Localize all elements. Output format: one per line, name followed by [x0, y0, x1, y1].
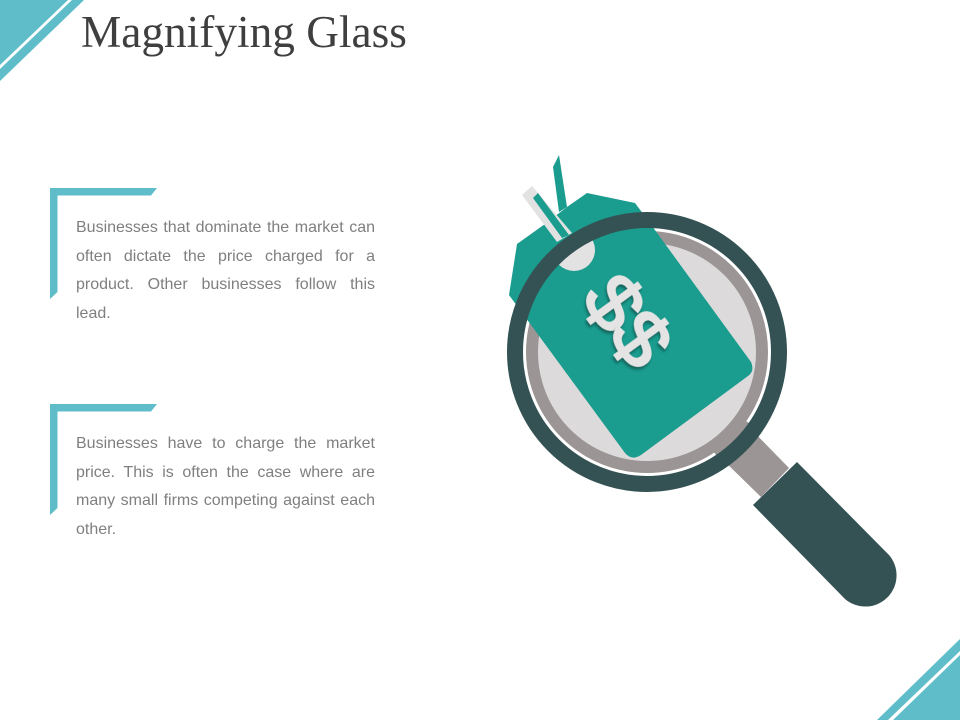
- magnifier dark ring: [515, 220, 779, 484]
- tag string: teal strip upper: [553, 155, 567, 212]
- text block: market price: Businesses have to charge the market price. This is often the case where are many small firms competing against each other.: [76, 435, 375, 538]
- icon: magnifying glass over price tag: [507, 155, 897, 606]
- dollar sign two: $: [593, 295, 689, 383]
- decorative corner: top left: [0, 0, 84, 81]
- text block: dominant businesses: Businesses that dominate the market can often dictate the price charged for a product. Other businesses follow this lead.: [76, 219, 375, 322]
- tag string: teal strip inner: [533, 193, 569, 238]
- bracket accent: first text block: [50, 188, 157, 299]
- lens glass: [537, 242, 757, 462]
- tag string: light strip: [522, 186, 572, 242]
- bracket accent: second text block: [50, 404, 157, 515]
- price tag hole: [559, 240, 595, 271]
- magnifier neck: [718, 426, 789, 497]
- decorative corner: bottom right: [877, 639, 960, 720]
- price tag body: [509, 193, 752, 458]
- dollar sign one: $: [566, 259, 662, 347]
- title: Magnifying Glass: [81, 7, 407, 57]
- lens grey ring: [532, 237, 762, 467]
- magnifier handle: [753, 462, 897, 607]
